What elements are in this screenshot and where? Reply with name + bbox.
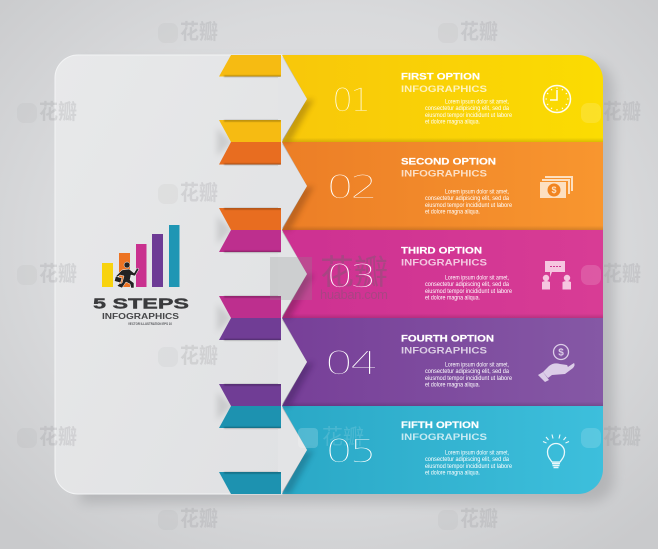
text block 2: et dolore magna aliqua. xyxy=(425,208,480,216)
watermark marks: 花瓣 xyxy=(39,263,77,286)
text block 1: eiusmod tempor incididunt ut labore xyxy=(425,112,512,119)
text block 2: Lorem ipsum dolor sit amet, xyxy=(445,188,509,196)
text block 4: et dolore magna aliqua. xyxy=(425,382,480,388)
number 03: 03 xyxy=(326,257,373,295)
icon: light bulb xyxy=(543,434,569,468)
watermark marks: 花瓣 xyxy=(180,182,218,205)
icon: cash xyxy=(540,176,573,198)
text block 2: SECOND OPTION xyxy=(401,156,496,166)
icon: clock xyxy=(544,86,570,112)
card shadow xyxy=(80,62,614,503)
watermark marks: 花瓣 xyxy=(322,426,364,449)
text block 3: eiusmod tempor incididunt ut labore xyxy=(425,288,512,295)
text block 2: INFOGRAPHICS xyxy=(401,168,487,178)
icon: people talking xyxy=(542,261,571,290)
number 02: 02 xyxy=(326,168,375,206)
text block 1: Lorem ipsum dolor sit amet, xyxy=(445,98,509,106)
fold shadows on card xyxy=(217,128,232,420)
watermark marks: 花瓣 xyxy=(180,508,218,531)
watermark marks: 花瓣 xyxy=(39,426,77,449)
logo title: 5 STEPS xyxy=(93,296,189,312)
text block 4: eiusmod tempor incididunt ut labore xyxy=(425,375,512,382)
text block 2: consectetur adipiscing elit, sed da xyxy=(425,195,509,202)
text block 3 xyxy=(401,246,512,302)
watermark marks: 花瓣 xyxy=(39,101,77,124)
text block 3: INFOGRAPHICS xyxy=(401,258,487,268)
panel: white card xyxy=(55,55,282,494)
number 01: 01 xyxy=(332,81,368,119)
icon: hand with coin xyxy=(538,344,575,382)
text block 3: Lorem ipsum dolor sit amet, xyxy=(445,274,509,282)
text block 1 xyxy=(401,72,512,126)
text block 4: Lorem ipsum dolor sit amet, xyxy=(445,362,509,368)
panel: band 1 yellow xyxy=(219,55,603,142)
watermark marks: huaban.com xyxy=(320,287,388,302)
number 04: 04 xyxy=(324,344,376,382)
icon: cash: $ xyxy=(551,185,557,195)
text block 5: consectetur adipiscing elit, sed da xyxy=(425,456,509,463)
tab inner shadows xyxy=(224,76,281,474)
text block 2: eiusmod tempor incididunt ut labore xyxy=(425,202,512,209)
text block 4: consectetur adipiscing elit, sed da xyxy=(425,368,509,375)
arrows xyxy=(278,55,307,494)
watermark marks: 花瓣 xyxy=(180,345,218,368)
text block 5: et dolore magna aliqua. xyxy=(425,470,480,476)
text block 3: THIRD OPTION xyxy=(401,246,482,256)
logo title xyxy=(93,296,189,326)
logo title: VECTOR ILLUSTRATION EPS 10 xyxy=(128,322,172,326)
text block 5: eiusmod tempor incididunt ut labore xyxy=(425,463,512,470)
text block 1: INFOGRAPHICS xyxy=(401,84,487,94)
watermark marks: 花瓣 xyxy=(320,254,388,292)
watermark marks: 花瓣 xyxy=(603,263,641,286)
text block 4 xyxy=(401,334,512,388)
text block 5: FIFTH OPTION xyxy=(401,420,479,430)
text block 5 xyxy=(401,420,512,476)
text block 4: FOURTH OPTION xyxy=(401,334,494,344)
text block 1: FIRST OPTION xyxy=(401,72,480,82)
text block 5: Lorem ipsum dolor sit amet, xyxy=(445,450,509,456)
watermark marks: 花瓣 xyxy=(460,508,498,531)
watermark marks: 花瓣 xyxy=(180,21,218,44)
text block 2 xyxy=(401,156,512,216)
watermark marks: 花瓣 xyxy=(603,101,641,124)
logo title: INFOGRAPHICS xyxy=(102,312,180,321)
text block 3: et dolore magna aliqua. xyxy=(425,294,480,302)
panel: band 3 magenta xyxy=(219,230,603,318)
text block 1: consectetur adipiscing elit, sed da xyxy=(425,105,509,112)
numbers xyxy=(324,81,376,470)
text block 5: INFOGRAPHICS xyxy=(401,432,487,442)
bar chart logo xyxy=(102,225,180,287)
watermark marks: 花瓣 xyxy=(603,426,641,449)
icon: running businessman xyxy=(114,262,139,288)
text block 4: INFOGRAPHICS xyxy=(401,346,487,356)
panel: band 2 orange xyxy=(219,142,603,230)
text block 1: et dolore magna aliqua. xyxy=(425,118,480,126)
watermark marks: 花瓣 xyxy=(460,21,498,44)
icon: hand with coin: $ xyxy=(558,348,564,358)
panel: band 4 purple xyxy=(219,318,603,406)
arrow shadows xyxy=(280,99,314,494)
text block 3: consectetur adipiscing elit, sed da xyxy=(425,281,509,288)
panel: band 5 teal xyxy=(219,406,603,494)
number 05: 05 xyxy=(325,432,373,470)
